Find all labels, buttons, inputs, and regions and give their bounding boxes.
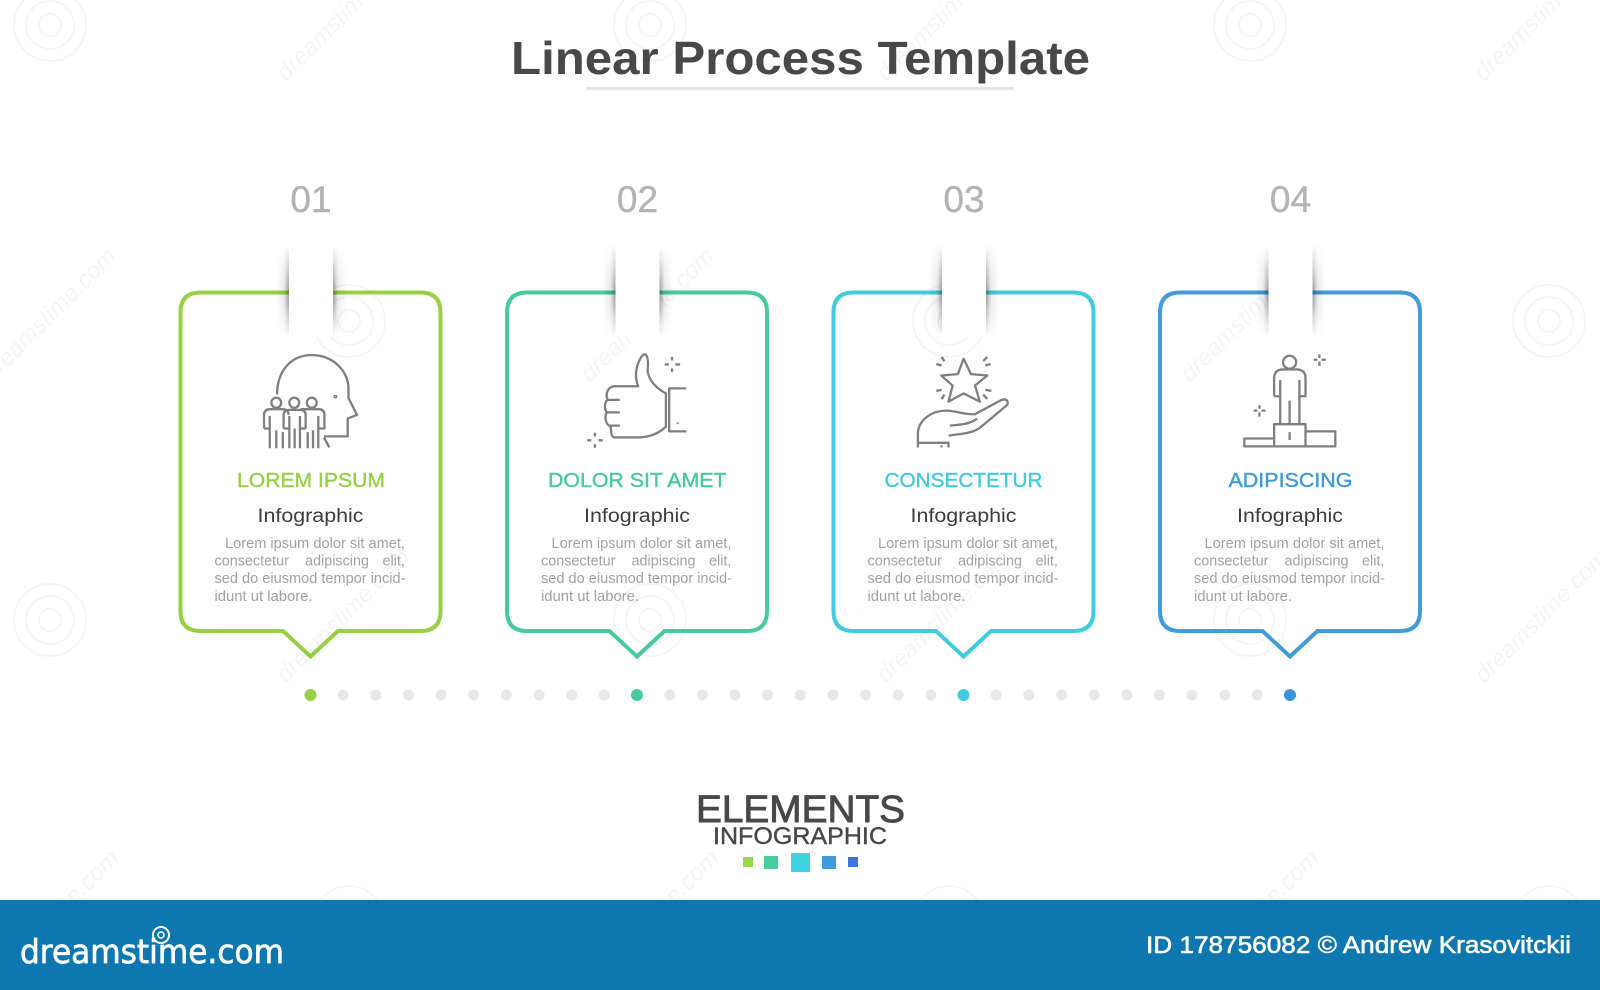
body text: sed do eiusmod tempor incid-: [541, 571, 732, 587]
heading: CONSECTETUR: [884, 470, 1042, 492]
heading: LOREM IPSUM: [237, 470, 385, 492]
subheading: Infographic: [258, 506, 364, 527]
body text: idunt ut labore.: [214, 589, 312, 605]
body text: adipiscing: [1284, 554, 1348, 570]
body text: Lorem ipsum dolor sit amet,: [878, 536, 1058, 552]
tab strip with shadow: [606, 249, 669, 337]
body text: consectetur: [868, 554, 942, 570]
footer logo: dreamstime.com: dreamstime.com: [20, 932, 284, 971]
body text: [214, 536, 406, 605]
logo: elements infographic: [696, 789, 905, 872]
body text: sed do eiusmod tempor incid-: [1194, 571, 1385, 587]
watermark pattern: dreamstime.com: [271, 544, 416, 688]
watermark pattern: dreamstime.com: [1175, 243, 1320, 387]
body text: Lorem ipsum dolor sit amet,: [552, 536, 732, 552]
body text: adipiscing: [305, 554, 369, 570]
heading: DOLOR SIT AMET: [548, 470, 726, 492]
body text: [1194, 536, 1385, 605]
card outline with pointer: [834, 292, 1094, 656]
logo: elements infographic: ELEMENTS: [696, 789, 905, 831]
body text: sed do eiusmod tempor incid-: [868, 571, 1059, 587]
card outline with pointer: [507, 292, 767, 656]
tab strip with shadow: [932, 249, 996, 337]
step number 02: 02: [617, 179, 658, 220]
panel: step 04: [1160, 179, 1420, 656]
body text: Lorem ipsum dolor sit amet,: [1204, 536, 1384, 552]
watermark pattern: dreamstime.com: [580, 845, 725, 989]
footer credit: ID 178756082 © Andrew Krasovitckii: [1146, 932, 1571, 959]
subheading: Infographic: [584, 506, 690, 527]
card outline with pointer: [1160, 292, 1420, 656]
step number 03: 03: [943, 179, 985, 220]
logo: elements infographic: INFOGRAPHIC: [713, 823, 887, 850]
footer bar: [0, 900, 1600, 990]
body text: [541, 536, 732, 605]
panel: step 01: [180, 179, 440, 656]
panel: step 03: [834, 179, 1094, 656]
dotted timeline: [304, 689, 1296, 701]
body text: sed do eiusmod tempor incid-: [214, 571, 406, 587]
body text: idunt ut labore.: [1194, 589, 1292, 605]
tab strip with shadow: [279, 249, 343, 337]
tab strip with shadow: [1259, 249, 1322, 334]
body text: adipiscing: [958, 554, 1022, 570]
body text: consectetur: [214, 554, 289, 570]
body text: elit,: [382, 554, 405, 570]
body text: idunt ut labore.: [541, 589, 639, 605]
body text: idunt ut labore.: [868, 589, 966, 605]
subheading: Infographic: [1237, 506, 1343, 527]
heading: ADIPISCING: [1228, 470, 1352, 492]
icon: head with group of people: [264, 355, 357, 448]
step number 04: 04: [1270, 179, 1311, 220]
watermark pattern: dreamstime.com: [871, 544, 1016, 688]
body text: elit,: [1036, 554, 1058, 570]
body text: adipiscing: [632, 554, 696, 570]
icon: hand holding star: [918, 357, 1008, 447]
body text: elit,: [1362, 554, 1384, 570]
watermark pattern: dreamstime.com: [575, 243, 720, 387]
step number 01: 01: [290, 179, 332, 220]
body text: Lorem ipsum dolor sit amet,: [225, 536, 405, 552]
body text: consectetur: [1194, 554, 1269, 570]
body text: consectetur: [541, 554, 616, 570]
subheading: Infographic: [910, 506, 1016, 527]
title: Linear Process Template: [511, 32, 1090, 84]
icon: person on podium: [1244, 354, 1335, 446]
card outline with pointer: [180, 292, 440, 656]
body text: elit,: [709, 554, 731, 570]
icon: thumbs up: [587, 354, 686, 448]
body text: [868, 536, 1059, 605]
watermark pattern: dreamstime.com: [1180, 845, 1325, 989]
panel: step 02: [507, 179, 767, 656]
